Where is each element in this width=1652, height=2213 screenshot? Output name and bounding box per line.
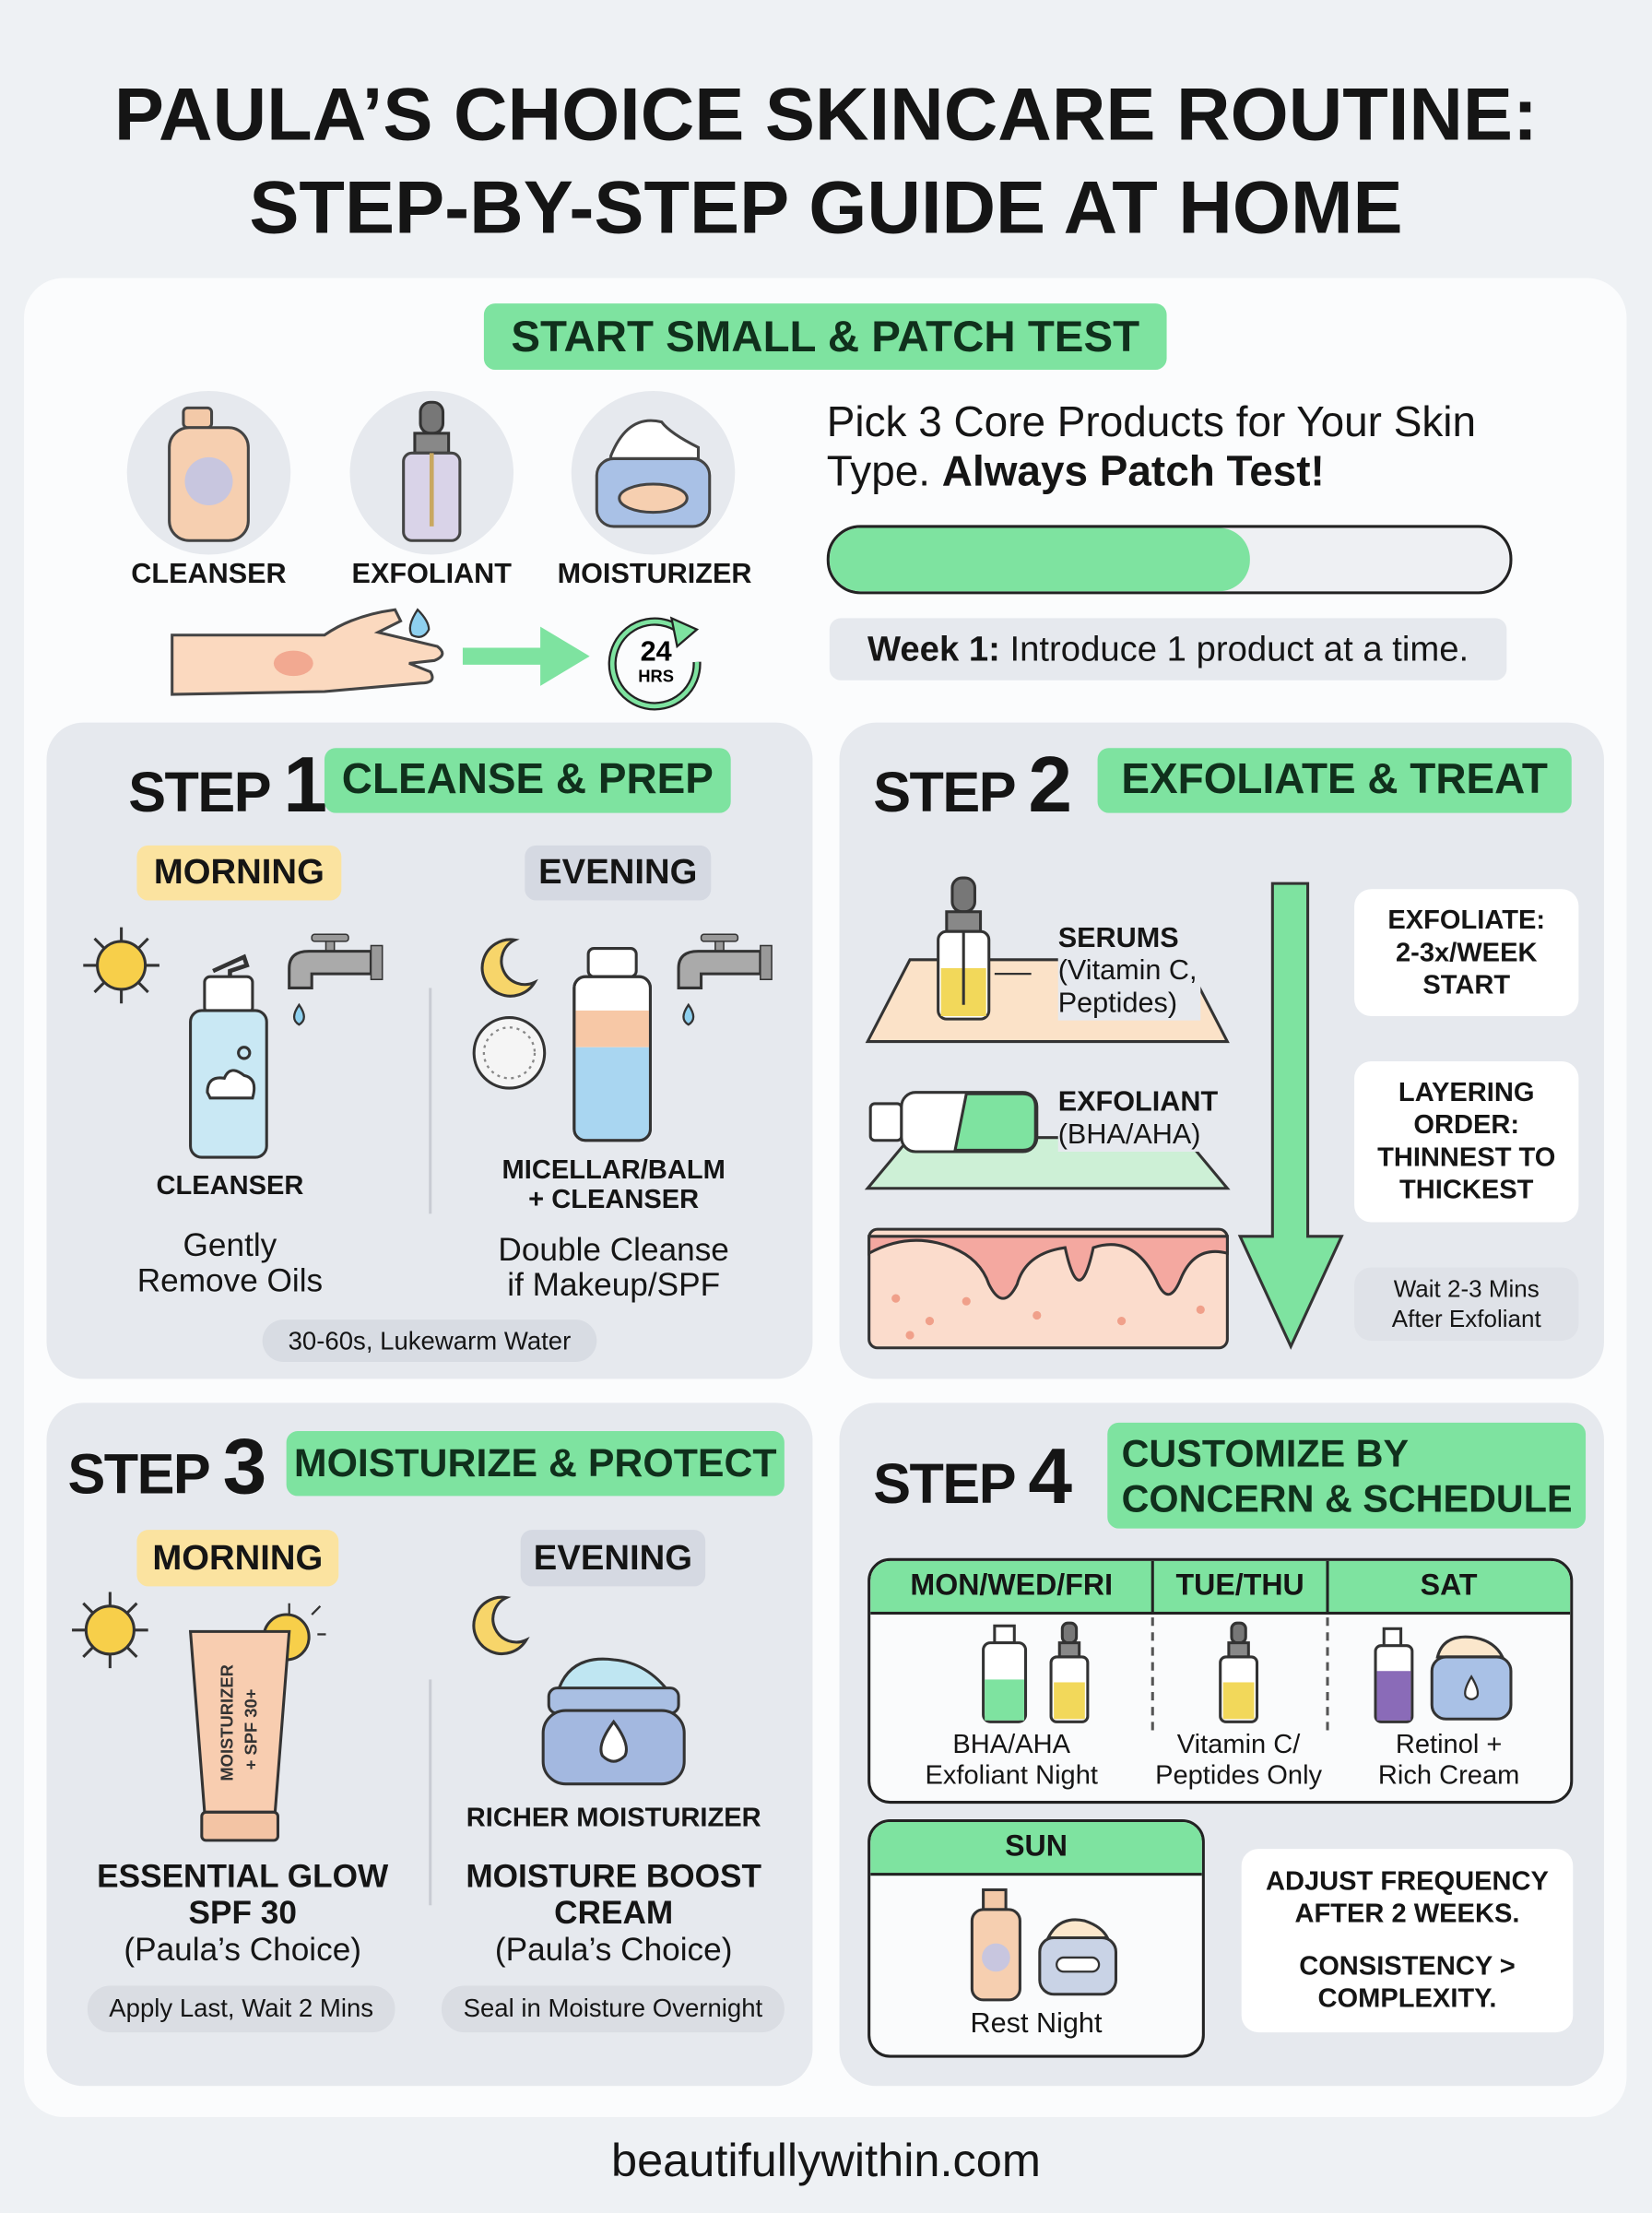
box: adjust frequency: CONSISTENCY > bbox=[1299, 1952, 1516, 1982]
text: pick 3: Pick 3 Core Products for Your Skin Type. Always Patch Test! bbox=[827, 399, 1476, 495]
patch test section: MOISTURIZER bbox=[558, 559, 751, 590]
footer: beautifullywithin.com bbox=[611, 2134, 1041, 2186]
evening product text: (Paula’s Choice) bbox=[495, 1931, 732, 1968]
exfoliant text bbox=[1058, 1087, 1218, 1152]
morning text: CLEANSER bbox=[156, 1171, 303, 1201]
morning text bbox=[137, 1171, 323, 1298]
morning product text: ESSENTIAL GLOW bbox=[97, 1857, 388, 1894]
icon: rich cream jar bbox=[542, 1658, 686, 1785]
divider bbox=[429, 988, 431, 1213]
morning pill: MORNING bbox=[152, 1538, 323, 1577]
box: wait: After Exfoliant bbox=[1392, 1306, 1541, 1332]
icon: moon bbox=[481, 938, 538, 998]
table captions: Exfoliant Night bbox=[925, 1761, 1098, 1791]
heading: STEP 1 bbox=[128, 740, 326, 828]
morning product text: (Paula’s Choice) bbox=[124, 1931, 361, 1968]
big arrow bbox=[1237, 882, 1344, 1350]
tue icons bbox=[1219, 1621, 1259, 1723]
weekly schedule table: Peptides Only bbox=[1155, 1761, 1322, 1791]
icon: 24 hrs bbox=[608, 616, 702, 710]
serums text bbox=[1058, 923, 1200, 1021]
morning pill bbox=[136, 846, 341, 901]
labels: CLEANSER bbox=[131, 559, 287, 590]
panel: step 2: EXFOLIATE & TREAT bbox=[1121, 756, 1548, 803]
icon: spf tube: + SPF 30+ bbox=[242, 1689, 261, 1769]
panel: step 1: CLEANSE & PREP bbox=[342, 756, 714, 803]
icon: faucet bbox=[288, 933, 384, 1025]
box: adjust frequency: ADJUST FREQUENCY bbox=[1266, 1867, 1549, 1897]
icon: spf tube: MOISTURIZER bbox=[218, 1664, 236, 1781]
box: layering: THINNEST TO bbox=[1377, 1143, 1555, 1173]
panel: step 4: CUSTOMIZE BY bbox=[1122, 1433, 1409, 1474]
rest icons bbox=[970, 1888, 1117, 2001]
morning pill: MORNING bbox=[154, 852, 324, 892]
icon: sun bbox=[83, 928, 159, 1003]
serums text: (Vitamin C, bbox=[1058, 955, 1198, 987]
weekly schedule table bbox=[867, 1558, 1573, 1804]
skin cross-section bbox=[867, 1228, 1229, 1350]
week 1 note: Week 1: Introduce 1 product at a time. bbox=[867, 629, 1469, 669]
note pill evening: Seal in Moisture Overnight bbox=[464, 1994, 762, 2022]
evening pill: EVENING bbox=[538, 852, 697, 892]
panel: step 3 bbox=[46, 1402, 812, 2086]
evening product text bbox=[466, 1857, 761, 1968]
arrow bbox=[463, 627, 590, 686]
evening pill bbox=[525, 846, 711, 901]
morning product text: SPF 30 bbox=[189, 1894, 297, 1931]
icon: moon bbox=[472, 1595, 530, 1656]
serums text: SERUMS bbox=[1058, 923, 1179, 954]
evening product text: MOISTURE BOOST bbox=[466, 1857, 761, 1894]
heading: start small bbox=[484, 303, 1167, 370]
icon: spf tube bbox=[188, 1603, 326, 1842]
box: wait: Wait 2-3 Mins bbox=[1394, 1276, 1540, 1303]
icon: pump bottle bbox=[189, 953, 268, 1159]
table header bbox=[870, 1561, 1570, 1615]
box: exfoliate freq bbox=[1354, 889, 1578, 1016]
morning product text bbox=[97, 1857, 389, 1968]
note pill morning bbox=[88, 1986, 395, 2032]
box: exfoliate freq: EXFOLIATE: bbox=[1387, 905, 1545, 935]
icon: cleanser bbox=[127, 391, 291, 555]
icon: exfoliant bbox=[350, 391, 513, 555]
icon: hand patch test bbox=[171, 608, 444, 696]
panel: step 1 bbox=[46, 723, 812, 1379]
heading: STEP 3 bbox=[67, 1421, 266, 1510]
panel: step 4: CONCERN & SCHEDULE bbox=[1122, 1478, 1573, 1520]
morning pill bbox=[136, 1530, 338, 1586]
sun rest box: Rest Night bbox=[971, 2008, 1102, 2040]
box: adjust frequency: COMPLEXITY. bbox=[1318, 1984, 1496, 2014]
sun rest box: SUN bbox=[1005, 1830, 1068, 1863]
richer label: RICHER MOISTURIZER bbox=[466, 1804, 761, 1833]
box: wait bbox=[1354, 1267, 1578, 1341]
serum platform bbox=[865, 876, 1230, 1044]
icon: moisturizer bbox=[572, 391, 736, 555]
morning text: Gently bbox=[183, 1226, 277, 1263]
table captions bbox=[925, 1731, 1098, 1791]
evening text: + CLEANSER bbox=[528, 1186, 699, 1215]
mon icons bbox=[982, 1621, 1090, 1723]
exfoliant text: (BHA/AHA) bbox=[1058, 1119, 1200, 1150]
sat icons bbox=[1374, 1627, 1512, 1723]
box: exfoliate freq: 2-3x/WEEK bbox=[1396, 938, 1537, 967]
table header: SAT bbox=[1421, 1569, 1478, 1602]
evening text: Double Cleanse bbox=[498, 1231, 729, 1267]
heading: start small: START SMALL & PATCH TEST bbox=[511, 311, 1139, 361]
table captions: BHA/AHA bbox=[952, 1731, 1070, 1760]
note pill: 30-60s, Lukewarm Water bbox=[289, 1326, 571, 1355]
evening product text: CREAM bbox=[554, 1894, 673, 1931]
panel: step 4 bbox=[840, 1402, 1604, 2086]
icon: 24 hrs: HRS bbox=[638, 666, 674, 685]
title: STEP-BY-STEP GUIDE AT HOME bbox=[249, 167, 1403, 250]
exfoliant platform bbox=[865, 1091, 1230, 1189]
note pill evening bbox=[442, 1986, 785, 2032]
evening pill: EVENING bbox=[534, 1538, 692, 1577]
divider bbox=[429, 1679, 431, 1905]
exfoliant text: EXFOLIANT bbox=[1058, 1087, 1218, 1118]
note pill morning: Apply Last, Wait 2 Mins bbox=[109, 1994, 373, 2022]
weekly schedule table: Retinol + bbox=[1396, 1731, 1502, 1760]
table header: MON/WED/FRI bbox=[910, 1569, 1113, 1602]
box: adjust frequency: AFTER 2 WEEKS. bbox=[1294, 1899, 1519, 1929]
icon: 24 hrs: 24 bbox=[641, 635, 672, 667]
heading: STEP 4 bbox=[873, 1431, 1071, 1520]
evening text: MICELLAR/BALM bbox=[502, 1156, 726, 1186]
morning text: Remove Oils bbox=[137, 1261, 323, 1298]
panel: step 2 bbox=[840, 723, 1604, 1379]
evening text: if Makeup/SPF bbox=[507, 1266, 720, 1303]
week 1 note bbox=[830, 618, 1506, 680]
heading: STEP 2 bbox=[873, 740, 1071, 828]
icon: sun bbox=[72, 1592, 148, 1669]
title bbox=[114, 74, 1538, 250]
patch test section bbox=[127, 303, 1512, 710]
evening pill bbox=[521, 1530, 705, 1586]
note pill bbox=[263, 1320, 596, 1362]
box: layering: LAYERING bbox=[1398, 1078, 1535, 1108]
box: exfoliate freq: START bbox=[1422, 970, 1510, 1000]
evening text bbox=[498, 1156, 729, 1303]
title: PAULA’S CHOICE SKINCARE ROUTINE: bbox=[114, 74, 1538, 157]
patch test section: EXFOLIANT bbox=[352, 559, 512, 590]
icon: faucet 2 bbox=[677, 933, 773, 1025]
weekly schedule table: Vitamin C/ bbox=[1177, 1731, 1300, 1760]
box: layering: THICKEST bbox=[1399, 1176, 1533, 1205]
sun rest box bbox=[867, 1819, 1205, 2058]
table header: TUE/THU bbox=[1176, 1569, 1304, 1602]
box: layering bbox=[1354, 1061, 1578, 1222]
panel: step 3: MOISTURIZE & PROTECT bbox=[294, 1441, 777, 1485]
box: adjust frequency bbox=[1242, 1849, 1573, 2032]
icon: micellar bottle bbox=[572, 947, 652, 1142]
progress bar bbox=[827, 525, 1512, 594]
box: layering: ORDER: bbox=[1413, 1111, 1519, 1141]
serums text: Peptides) bbox=[1058, 988, 1177, 1019]
weekly schedule table: Rich Cream bbox=[1378, 1761, 1519, 1791]
icon: cotton pad bbox=[472, 1016, 546, 1090]
